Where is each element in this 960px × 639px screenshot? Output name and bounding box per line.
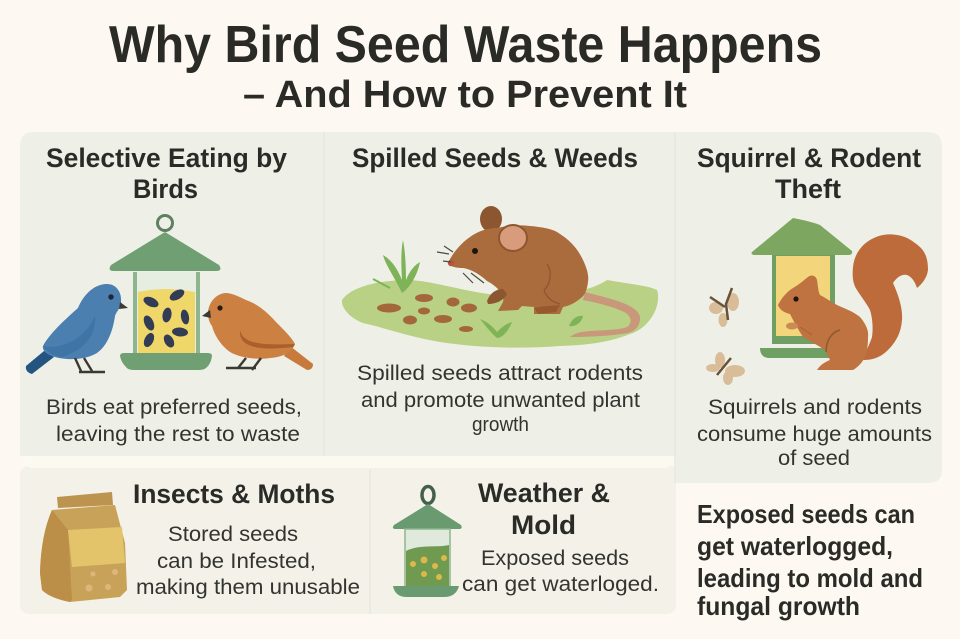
panel: weather and mold [393,478,659,597]
text: insects body: can be Infested, [157,549,316,573]
callout: exposed seeds: get waterlogged, [697,531,893,561]
text: squirrel body [697,395,932,470]
heading: squirrel theft: Theft [775,174,841,204]
icon: seed bag [40,492,127,602]
text: spilled seeds body: growth [472,413,529,436]
heading: selective eating: Selective Eating by [46,143,287,173]
text: spilled seeds body [357,361,643,436]
text: insects body: Stored seeds [168,522,298,546]
title: – And How to Prevent It [243,74,687,116]
panel: top causes background [20,132,942,483]
icon: moths [706,288,745,385]
heading: insects: Insects & Moths [133,479,335,509]
text: spilled seeds body: and promote unwanted plant [361,388,640,412]
heading: selective eating [46,143,287,204]
panel: spilled seeds [342,143,658,436]
panel: selective eating [26,143,313,446]
text: weather body: can get waterloged. [462,572,659,596]
panel: insects and moths [40,479,360,602]
text: selective eating body: Birds eat preferred seeds, [46,395,302,419]
title [109,16,822,116]
heading: selective eating: Birds [133,174,198,204]
icon: seed feeder [110,216,220,370]
heading: weather: Mold [511,510,576,540]
text: squirrel body: of seed [778,446,850,470]
text: selective eating body: leaving the rest to waste [56,422,300,446]
heading: spilled seeds: Spilled Seeds & Weeds [352,143,638,173]
heading: weather: Weather & [478,478,610,508]
panel: squirrel theft [697,143,932,470]
heading: weather [478,478,610,540]
callout: exposed seeds [697,499,923,621]
callout: exposed seeds: leading to mold and [697,563,923,593]
icon: moldy feeder [393,486,462,597]
icon: squirrel feeder [752,218,852,358]
icon: orange bird [202,293,313,370]
text: spilled seeds body: Spilled seeds attract rodents [357,361,643,385]
panel: bottom causes background [20,466,676,614]
icon: blue bird [26,284,128,374]
text: insects body [136,522,360,599]
icon: squirrel [778,234,928,370]
text: insects body: making them unusable [136,575,360,599]
icon: mouse [437,206,640,337]
text: weather body [462,546,659,596]
illustration: grass patch and seeds [342,240,658,348]
heading: squirrel theft [697,143,921,204]
text: squirrel body: consume huge amounts [697,422,932,446]
heading: squirrel theft: Squirrel & Rodent [697,143,921,173]
text: weather body: Exposed seeds [481,546,629,570]
callout: exposed seeds: Exposed seeds can [697,499,915,529]
title: Why Bird Seed Waste Happens [109,16,822,74]
text: selective eating body [46,395,302,446]
callout: exposed seeds: fungal growth [697,591,860,621]
text: squirrel body: Squirrels and rodents [708,395,922,419]
